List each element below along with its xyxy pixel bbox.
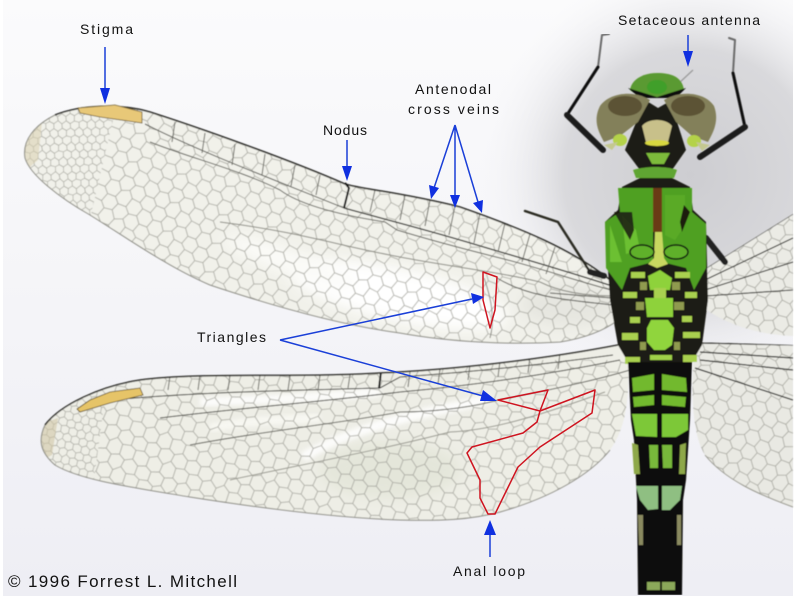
label: Nodus: Nodus <box>323 122 367 138</box>
forewing triangle <box>483 272 497 328</box>
lower left wing <box>40 344 630 522</box>
upper left wing <box>24 104 615 344</box>
label: Stigma: Stigma <box>80 21 133 37</box>
blue arrows <box>100 35 693 557</box>
arrow: stigma <box>100 47 110 104</box>
arrows: antenodal cross veins <box>429 125 483 213</box>
legs <box>525 34 745 276</box>
abdomen <box>628 362 692 595</box>
label: Triangles: Triangles <box>197 329 266 345</box>
hindwing triangle <box>498 390 548 411</box>
label: Anal loop: Anal loop <box>453 563 525 579</box>
arrow: nodus <box>342 140 352 181</box>
upper wing stigma <box>78 105 142 123</box>
nodus <box>344 183 349 208</box>
head <box>597 73 716 178</box>
arrow: setaceous antenna <box>683 35 693 67</box>
label: Antenodal cross veins <box>408 81 499 117</box>
anal loop <box>467 390 595 514</box>
red outlines <box>467 272 595 514</box>
label: Setaceous antenna: Setaceous antenna <box>618 12 760 28</box>
lower wing longitudinal veins <box>110 353 630 480</box>
arrow: anal loop <box>484 520 496 557</box>
label: Antenodal cross veins: Antenodal <box>415 81 491 97</box>
label: Antenodal cross veins: cross veins <box>408 101 499 117</box>
antenna <box>678 70 693 84</box>
thorax <box>605 178 708 364</box>
copyright: © 1996 Forrest L. Mitchell <box>8 572 237 591</box>
lower wing stigma <box>77 388 143 412</box>
arrows: triangles <box>280 293 497 401</box>
upper wing longitudinal veins <box>145 122 615 338</box>
right wings <box>690 210 800 510</box>
